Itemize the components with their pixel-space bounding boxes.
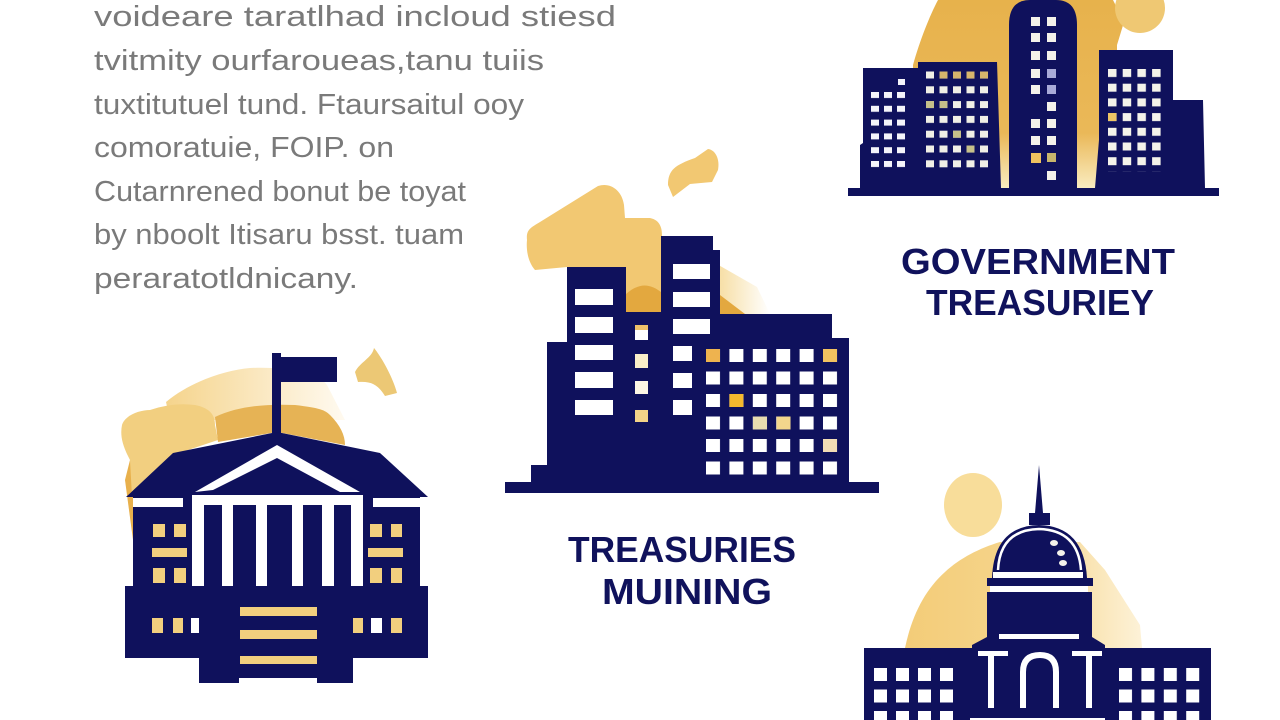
- label: government treasury: GOVERNMENT: [901, 241, 1175, 282]
- text block: intro paragraph: [94, 1, 616, 295]
- label: treasuries muining: TREASURIES: [568, 529, 796, 570]
- text block: intro paragraph: by nboolt Itisaru bsst. tuam: [94, 219, 464, 251]
- icon: government treasury skyscrapers: [848, 0, 1219, 196]
- label: government treasury: TREASURIEY: [926, 282, 1154, 323]
- text block: intro paragraph: peraratotldnicany.: [94, 263, 358, 295]
- text block: intro paragraph: tuxtitutuel tund. Ftaursaitul ooy: [94, 89, 525, 121]
- text block: intro paragraph: Cutarnrened bonut be toyat: [94, 176, 466, 208]
- label: government treasury: [901, 241, 1175, 323]
- text block: intro paragraph: voideare taratlhad incloud stiesd: [94, 1, 616, 33]
- icon: columned bank with flag: [121, 348, 428, 683]
- label: treasuries muining: MUINING: [602, 571, 772, 612]
- label: treasuries muining: [568, 529, 796, 612]
- text block: intro paragraph: tvitmity ourfaroueas,tanu tuiis: [94, 45, 544, 77]
- icon: domed capitol building: [864, 465, 1211, 720]
- text block: intro paragraph: comoratuie, FOIP. on: [94, 132, 394, 164]
- icon: treasuries office building: [505, 149, 879, 493]
